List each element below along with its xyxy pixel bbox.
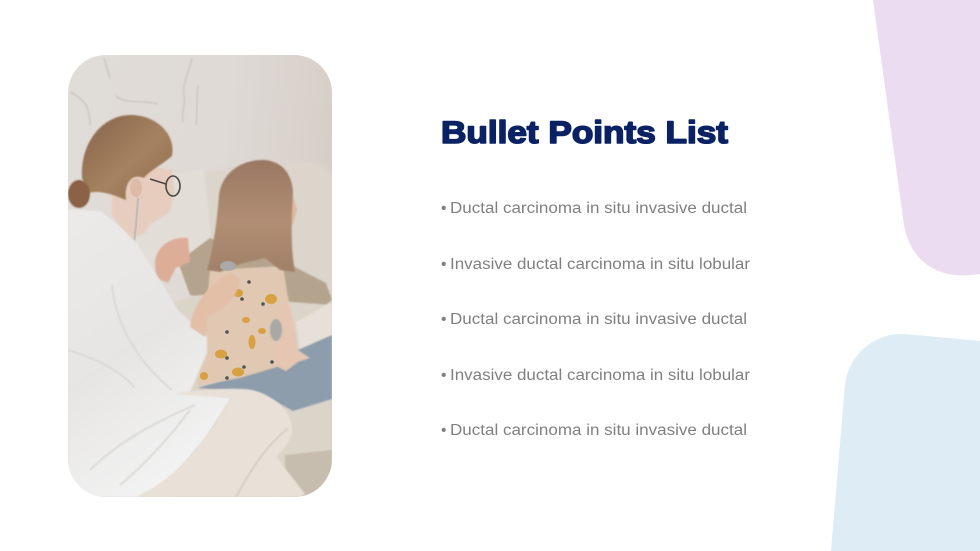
shirt lemon print — [200, 289, 277, 380]
doctor ear — [130, 179, 142, 197]
stethoscope tube — [134, 198, 138, 243]
coat folds — [68, 285, 195, 485]
doctor hair bun — [68, 180, 90, 208]
girl face — [291, 196, 298, 225]
brown throw pillow — [179, 238, 332, 305]
doctor hair — [82, 115, 173, 200]
bullet 5: • — [441, 422, 446, 439]
stethoscope head — [220, 261, 236, 271]
photo: doctor examining a child with a stethoscope — [68, 55, 334, 497]
girl arm — [272, 297, 310, 371]
right cushion — [208, 170, 229, 238]
girl jeans — [197, 335, 332, 411]
doctor white coat — [68, 209, 231, 497]
doctor neck and face — [112, 165, 174, 240]
bullet 3: Ductal carcinoma in situ invasive ductal — [450, 311, 747, 328]
trouser crease — [236, 428, 288, 497]
bullet 5: Ductal carcinoma in situ invasive ductal — [450, 422, 747, 439]
bullet 3: • — [441, 311, 446, 328]
glucose sensor on arm — [270, 319, 282, 341]
girl hair — [207, 160, 295, 272]
doctor hand on stethoscope — [190, 272, 240, 337]
sofa seat — [174, 294, 326, 392]
left pillow — [208, 212, 210, 238]
bullet list — [441, 200, 750, 439]
bullet 1: • — [441, 200, 446, 217]
bullet 2: Invasive ductal carcinoma in situ lobular — [450, 256, 750, 273]
glasses — [150, 176, 180, 196]
girl shirt — [197, 266, 288, 386]
doctor raised hand — [155, 238, 190, 283]
wall background — [68, 55, 332, 497]
bullet 4: • — [441, 367, 446, 384]
bullet 2: • — [441, 256, 446, 273]
decorative shape: lilac blob — [873, 0, 980, 275]
doctor cream trousers — [137, 389, 305, 497]
wall cracks — [70, 58, 198, 125]
title: Bullet Points List — [441, 114, 729, 150]
bullet 1: Ductal carcinoma in situ invasive ductal — [450, 200, 747, 217]
bullet 4: Invasive ductal carcinoma in situ lobular — [450, 367, 750, 384]
decorative shape: light blue blob — [831, 334, 980, 551]
